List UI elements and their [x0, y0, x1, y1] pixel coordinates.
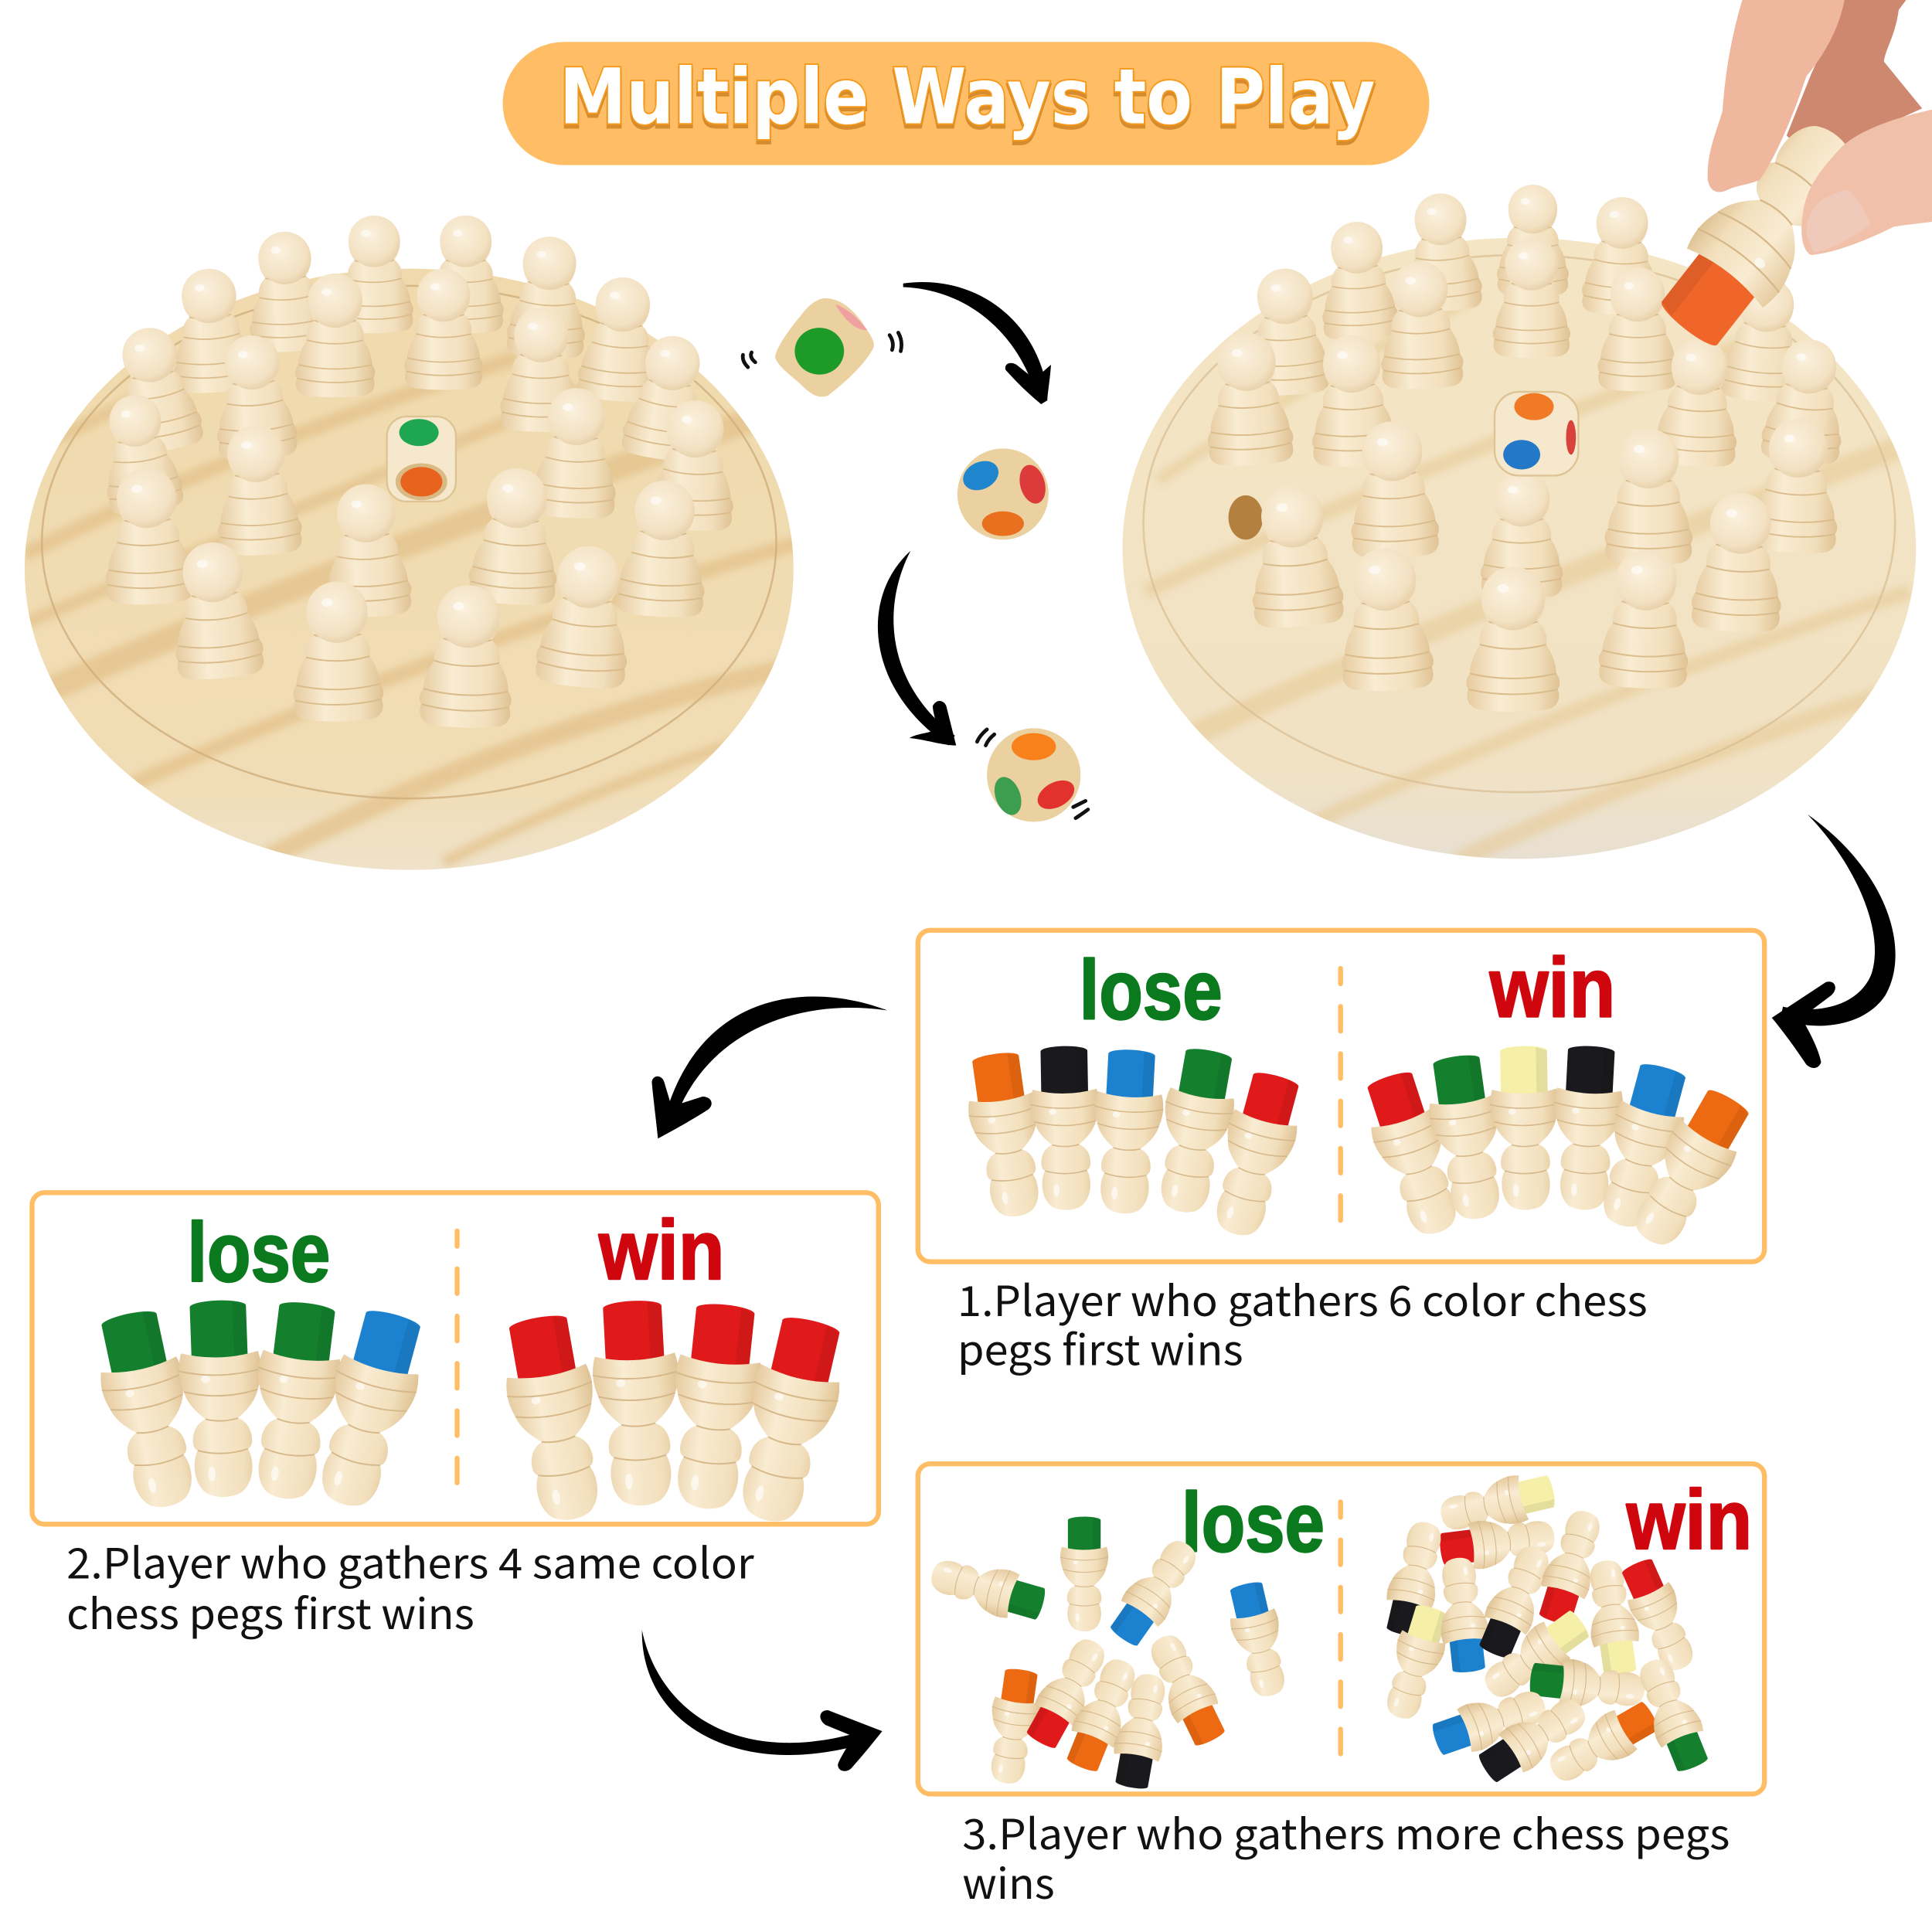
caption 3: wins	[962, 1850, 1055, 1911]
lose label: lose	[1182, 1475, 1325, 1569]
motion marks	[743, 332, 902, 367]
red dot	[1015, 462, 1049, 506]
caption 1: 1.Player who gathers 6 color chess	[957, 1267, 1648, 1328]
lose pegs	[926, 1517, 1294, 1791]
orange dot	[1012, 733, 1056, 760]
caption 2: 2.Player who gathers 4 same color	[66, 1529, 755, 1590]
panel frame	[918, 930, 1764, 1262]
board body	[1122, 238, 1916, 862]
die on right board	[1495, 392, 1578, 475]
arrow: panel two to panel three	[642, 1630, 883, 1771]
green dot	[990, 774, 1026, 818]
right wooden board with pegs and die	[1122, 185, 1916, 862]
title text: Multiple Ways to Play	[560, 53, 1375, 141]
pegs	[1202, 185, 1852, 712]
win label: win	[598, 1203, 725, 1297]
blue dot	[958, 455, 1003, 495]
die body	[987, 728, 1080, 821]
orange dot	[982, 512, 1024, 536]
die: orange green red	[977, 728, 1088, 821]
die: blue red orange	[957, 448, 1049, 539]
die: green top	[743, 298, 902, 396]
held peg	[1645, 104, 1877, 361]
board body	[12, 269, 801, 870]
arrow: panel one to panel two	[651, 996, 887, 1138]
thumb nail	[1806, 190, 1870, 253]
arrow: die two to die three	[878, 551, 956, 746]
win pegs	[495, 1298, 855, 1530]
die on left board	[387, 417, 456, 502]
caption 1: pegs first wins	[957, 1317, 1243, 1378]
pegs	[94, 215, 739, 730]
win pegs	[1376, 1467, 1716, 1793]
hand holding a peg	[1645, 0, 1932, 361]
pink dot	[835, 304, 867, 330]
lose pegs	[87, 1298, 434, 1515]
die body	[957, 448, 1049, 539]
panel frame	[32, 1192, 879, 1524]
caption 2: chess pegs first wins	[66, 1580, 474, 1641]
title pill background	[503, 42, 1429, 165]
title	[503, 42, 1429, 165]
index finger	[1708, 0, 1845, 192]
arrow: die one to die two	[903, 282, 1051, 404]
motion marks	[977, 730, 1088, 818]
divider	[1339, 968, 1342, 1223]
win label: win	[1626, 1473, 1752, 1566]
panel frame	[918, 1464, 1764, 1794]
lose pegs	[961, 1044, 1311, 1243]
divider	[456, 1231, 459, 1486]
die body	[775, 298, 874, 396]
thumb	[1801, 110, 1932, 255]
panel 2: four same color	[32, 1192, 879, 1530]
win label: win	[1489, 940, 1615, 1034]
back fingers	[1787, 0, 1922, 172]
win pegs	[1355, 1044, 1760, 1257]
panel 1: six colors	[918, 930, 1764, 1262]
arrow: right board to panel one	[1772, 815, 1896, 1068]
lose label: lose	[1080, 944, 1223, 1037]
red dot	[1032, 774, 1079, 815]
panel 3: more pegs	[918, 1464, 1764, 1794]
green dot	[794, 328, 844, 375]
title shadow text: Multiple Ways to Play	[560, 56, 1375, 145]
divider	[1339, 1502, 1342, 1756]
left wooden board with pegs and die	[12, 215, 801, 870]
caption 3: 3.Player who gathers more chess pegs	[962, 1801, 1730, 1862]
lose label: lose	[187, 1206, 330, 1299]
